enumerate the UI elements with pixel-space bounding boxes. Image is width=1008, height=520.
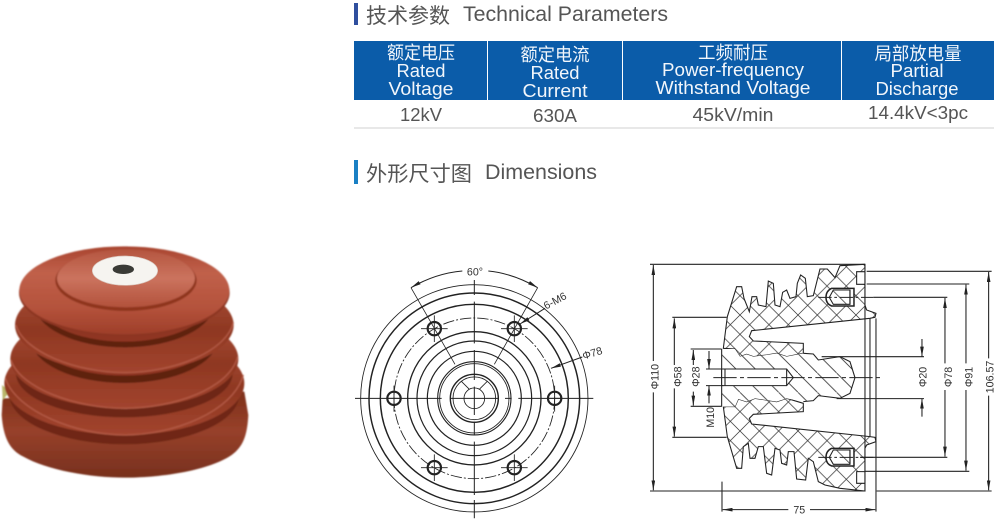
column: rated voltage header: Rated — [396, 61, 446, 81]
60 degree angle dimension: 60° — [467, 267, 483, 279]
threaded bore — [722, 369, 793, 386]
column: partial discharge header: Discharge — [876, 79, 958, 99]
dimension: M10: M10 — [705, 407, 717, 428]
raised inner ring — [55, 250, 197, 311]
table header background — [354, 41, 994, 100]
drawing: top view — [355, 267, 604, 518]
dimension: diameter 78: Φ78 — [943, 367, 955, 387]
heading: Dimensions: 外形尺寸图 — [366, 163, 472, 186]
base ledge shadow — [9, 344, 239, 444]
neck shadow 1 — [34, 259, 214, 347]
callout: 6-M6: 6-M6 — [542, 290, 569, 312]
upper insulation body — [722, 264, 877, 357]
heading: Technical Parameters: Technical Parameters — [463, 3, 668, 26]
callout: diameter 78 — [551, 345, 604, 368]
table values row — [400, 103, 968, 126]
drawing: cross section — [650, 262, 996, 517]
column: partial discharge header: 局部放电量 — [874, 44, 962, 64]
column: power-frequency withstand voltage header: 工频耐压 — [698, 43, 768, 63]
concentric rings — [361, 285, 588, 512]
lower insulation body — [720, 395, 880, 495]
callout: diameter 78: Φ78 — [581, 345, 604, 363]
dimension: diameter 28: Φ28 — [690, 366, 702, 387]
column: rated current header: 额定电流 — [520, 45, 590, 65]
heading: Dimensions — [354, 160, 597, 186]
column: rated voltage header: 额定电压 — [387, 43, 455, 63]
mounting holes — [387, 322, 561, 474]
heading: Technical Parameters — [354, 3, 668, 28]
base — [2, 392, 248, 478]
column: rated voltage header — [387, 43, 455, 99]
product photo: red insulator — [2, 246, 248, 478]
dimension: diameter 110: Φ110 — [650, 364, 662, 389]
table values row: 45kV/min — [692, 105, 774, 125]
dimension: diameter 20: Φ20 — [918, 367, 930, 387]
bolt circle — [394, 318, 555, 479]
dimension: diameter 58 — [672, 317, 727, 437]
dimension: diameter 58: Φ58 — [672, 366, 684, 387]
dimension: 106.57: 106.57 — [984, 361, 996, 393]
dimension: 106.57 — [867, 271, 996, 491]
column: rated current header: Current — [522, 81, 588, 101]
heading: Dimensions: Dimensions — [485, 161, 597, 184]
center lines — [355, 280, 593, 518]
table values row: 12kV — [400, 105, 442, 125]
dimension: diameter 20 — [822, 339, 930, 417]
table values row: 630A — [533, 106, 577, 126]
column: power-frequency withstand voltage header: Withstand Voltage — [656, 78, 810, 98]
neck shadow 2 — [31, 295, 218, 383]
central conductor — [722, 349, 855, 407]
column: power-frequency withstand voltage header: Power-frequency — [662, 60, 804, 80]
dimension: diameter 91: Φ91 — [964, 367, 976, 387]
table values row: 14.4kV<3pc — [868, 103, 968, 123]
threaded hole — [113, 265, 134, 274]
dimension: 75 — [722, 318, 876, 517]
small green edge — [2, 385, 10, 400]
skirt 4 — [4, 332, 244, 435]
column: partial discharge header — [874, 44, 962, 99]
dimension: diameter 28 — [690, 349, 722, 406]
column: power-frequency withstand voltage header — [656, 43, 810, 98]
flange edge details — [857, 272, 865, 483]
white metal insert — [92, 256, 158, 285]
column: partial discharge header: Partial — [890, 61, 944, 81]
column: rated voltage header: Voltage — [388, 79, 454, 99]
column: rated current header: Rated — [530, 63, 580, 83]
dimension: M10 — [705, 351, 723, 428]
dimension: diameter 78 — [860, 297, 955, 457]
skirt 2 — [15, 277, 234, 373]
top disc — [19, 249, 230, 337]
lower bolt insert — [826, 448, 854, 466]
dimension: diameter 110 — [650, 264, 865, 491]
dimension: diameter 91 — [865, 284, 976, 471]
upper bolt insert — [826, 288, 854, 306]
neck shadow 3 — [16, 329, 233, 417]
dimension: 75: 75 — [793, 505, 805, 517]
column: rated current header — [520, 45, 590, 101]
60 degree angle dimension — [411, 267, 538, 364]
table: technical parameters — [354, 41, 994, 129]
skirt 3 — [10, 310, 238, 408]
heading: Technical Parameters: 技术参数 — [366, 5, 450, 28]
callout: 6-M6 — [520, 290, 569, 324]
